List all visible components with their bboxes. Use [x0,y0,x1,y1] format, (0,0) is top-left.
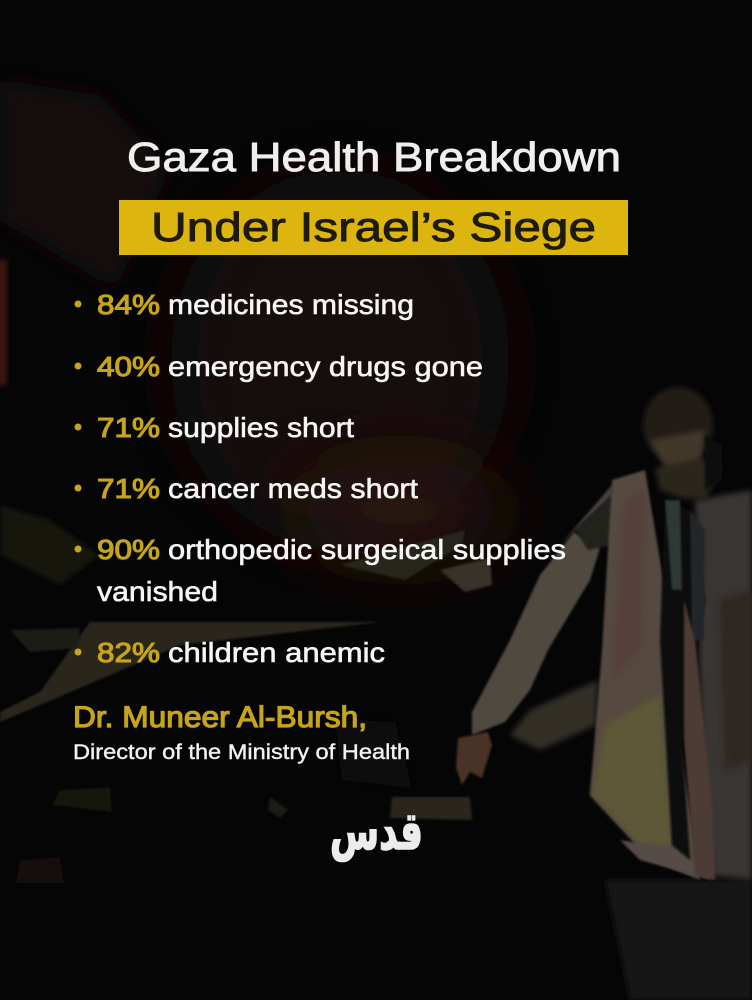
stat: orthopedic supplies: vanished [97,576,218,607]
debris by waist [510,680,598,750]
dark scarf strip [660,500,705,860]
stat: cancer meds [74,473,418,504]
scarf [590,470,700,880]
stat: children anemic [74,637,385,668]
attribution: Director of the Ministry of Health [73,741,410,764]
pink scarf strip [684,600,715,880]
hand [456,732,492,785]
logo: Quds wordmark: قدس [330,802,423,862]
stat: supplies: supplies short [168,412,354,443]
attribution: Dr. Muneer Al-Bursh, [73,701,367,734]
attribution [73,701,410,764]
stat: supplies: 71% [97,412,160,443]
stat: children anemic: 82% [97,637,160,668]
trousers [605,880,752,1000]
torso [695,490,752,880]
stat: children anemic: children anemic [168,637,385,668]
stat: emergency drugs: emergency drugs gone [168,351,483,382]
stat: medicines [74,289,414,320]
stat: orthopedic supplies [74,534,566,607]
heading banner [119,200,628,255]
sleeve [472,532,600,735]
face [643,387,713,463]
stat: cancer meds: 71% [97,473,160,504]
heading banner: Under Israel’s Siege [151,204,596,250]
stat: medicines: medicines missing [168,289,414,320]
stat: emergency drugs: 40% [97,351,160,382]
stat: medicines: 84% [97,289,160,320]
photo: man in scarf [456,387,752,1000]
stat: orthopedic supplies: 90% [97,534,160,565]
statistics list [74,289,566,668]
stat: orthopedic supplies: orthopedic surgeical supplies [168,534,566,565]
title: Gaza Health Breakdown [127,134,621,180]
stat: cancer meds: cancer meds short [168,473,418,504]
stat: supplies [74,412,354,443]
